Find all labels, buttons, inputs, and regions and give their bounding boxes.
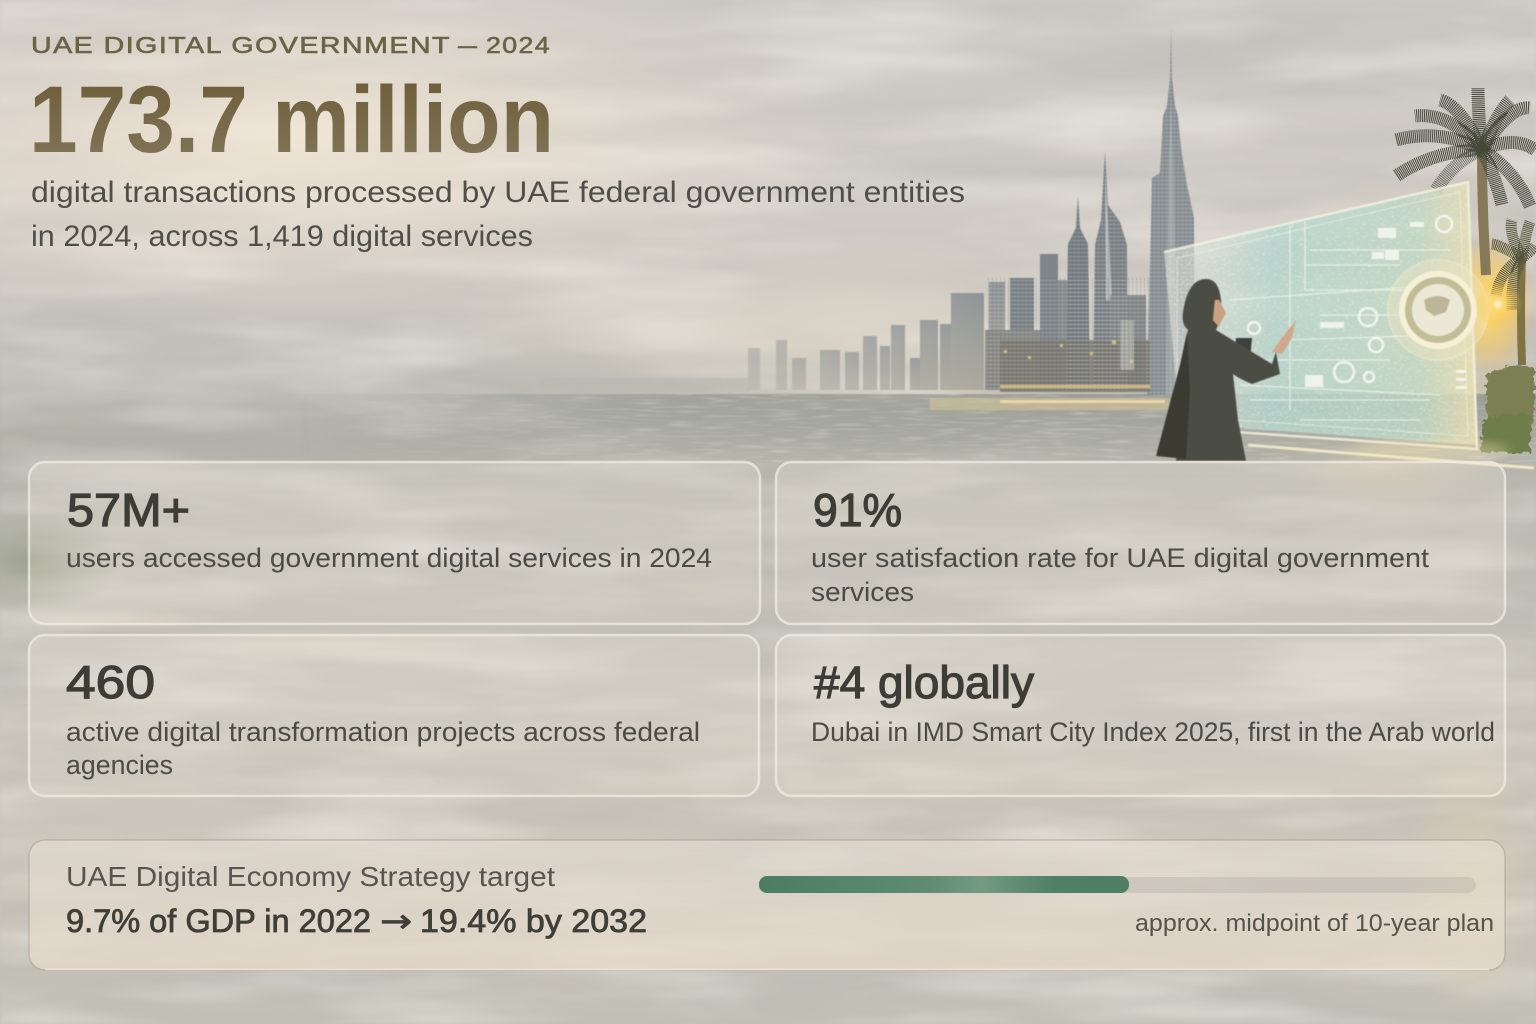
water reflection band [388, 394, 1536, 460]
sun glow [1471, 237, 1534, 370]
illustration: Dubai skyline across the water [300, 28, 1536, 464]
strategy figures: 19.4% by 2032 [420, 903, 647, 939]
strategy figures: 9.7% of GDP in 2022 [66, 903, 371, 939]
globe gauge [1388, 260, 1488, 360]
distant towers fading left [638, 254, 1068, 391]
panel: 57M+ users: 57M+ [67, 484, 190, 536]
shrubs [1486, 365, 1534, 425]
strategy figures: → [380, 902, 412, 940]
large palm [1396, 88, 1535, 275]
panel: digital economy strategy target [29, 840, 1505, 970]
panel: 57M+ users: users accessed government digital services in 2024 [66, 543, 712, 573]
eyebrow: — [458, 32, 478, 58]
headline number: 173.7 million [29, 67, 554, 173]
panel: #4 globally: Dubai in IMD Smart City Index 2025, first in the Arab world [811, 717, 1495, 747]
eyebrow: UAE DIGITAL GOVERNMENT [31, 32, 451, 58]
panel: 91% satisfaction [776, 462, 1505, 624]
Emirates-style tower [1093, 152, 1128, 390]
subheading [31, 176, 965, 253]
icon: palm trees and greenery [1396, 88, 1536, 453]
subheading: digital transactions processed by UAE federal government entities [31, 176, 965, 209]
figure: woman in abaya at the screen [1156, 279, 1296, 461]
strategy figures [66, 902, 647, 940]
panel: 91% satisfaction: services [811, 577, 914, 607]
panel: 460 projects: active digital transformation projects across federal [66, 717, 700, 747]
holographic government dashboard screen [1164, 180, 1534, 468]
eyebrow [31, 32, 551, 58]
subheading: in 2024, across 1,419 digital services [31, 220, 533, 253]
panel: 91% satisfaction: 91% [813, 484, 902, 536]
panel: 460 projects: agencies [66, 750, 173, 780]
progress bar [759, 876, 1476, 893]
panel: digital economy strategy target: UAE Digital Economy Strategy target [66, 861, 555, 892]
header block [29, 32, 965, 253]
panel: #4 globally [776, 635, 1505, 796]
panel: 460 projects: 460 [66, 656, 155, 708]
glow accents [1350, 440, 1510, 460]
panel: #4 globally: #4 globally [814, 657, 1035, 708]
small palm [1492, 220, 1535, 365]
panel: 91% satisfaction: user satisfaction rate for UAE digital government [811, 543, 1430, 573]
panel: 57M+ users [29, 462, 760, 624]
panel: 460 projects [29, 635, 759, 796]
panel: digital economy strategy target: approx. midpoint of 10-year plan [1135, 910, 1494, 937]
eyebrow: 2024 [486, 32, 551, 58]
twisted tower [1066, 196, 1090, 390]
lens flare [1474, 280, 1522, 328]
Burj Khalifa [1147, 28, 1195, 395]
